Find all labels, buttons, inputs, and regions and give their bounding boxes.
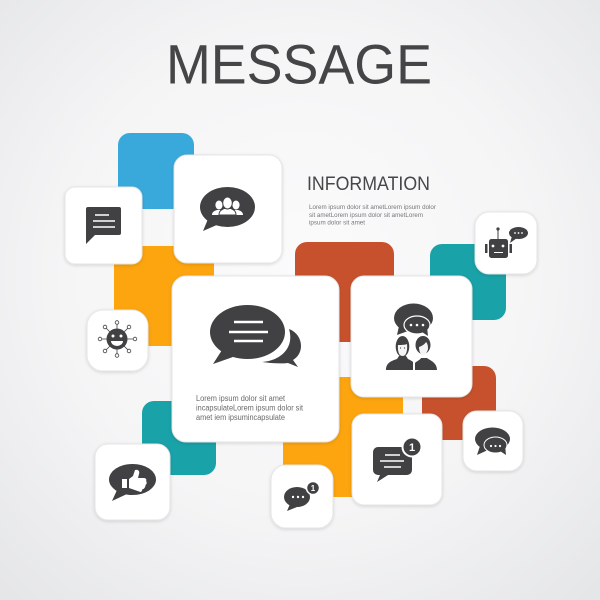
icon: double bubble (210, 305, 301, 367)
panel: notification message (352, 414, 442, 505)
block: teal left (142, 401, 216, 475)
panel: robot (475, 212, 537, 274)
icon: robot (485, 227, 528, 258)
block: red top (295, 242, 394, 342)
block: teal right (430, 244, 506, 320)
block: blue (118, 133, 194, 209)
panel: group chat (174, 155, 282, 263)
text block: information description: sit ametLorem ipsum dolor sit ametLorem (309, 212, 423, 219)
panel: smile network (87, 310, 148, 371)
panel: like (95, 444, 170, 520)
panel: message (65, 187, 142, 264)
text block: main description: Lorem ipsum dolor sit amet (196, 394, 286, 403)
icon: square bubble (86, 207, 121, 244)
block: red bottom (422, 366, 496, 440)
block: orange bottom (283, 377, 403, 497)
icon: smile network (98, 321, 137, 357)
title: MESSAGE (166, 32, 432, 96)
panel: chat bubbles (463, 411, 523, 471)
heading: information: INFORMATION (307, 174, 430, 195)
colour blocks (114, 133, 506, 497)
panel: couple (351, 276, 472, 397)
text block: main description (196, 394, 304, 422)
icon: thumbs up bubble (109, 464, 156, 501)
icon: group bubble (200, 187, 255, 231)
panel: small notification (271, 465, 333, 528)
icon: notification bubble: 1 (409, 442, 415, 454)
icon: dots bubble with badge: 1 (311, 484, 316, 493)
text block: main description: amet iem ipsumincapsulate (196, 413, 286, 422)
text block: main description: incapsulateLorem ipsum dolor sit (196, 404, 304, 412)
icon: couple with bubbles (386, 304, 437, 370)
icon: overlapping bubbles (475, 428, 510, 455)
text block: information description: Lorem ipsum dolor sit ametLorem ipsum dolor (309, 204, 437, 211)
text block: information description: ipsum dolor sit amet (309, 220, 365, 226)
text block: information description (309, 204, 437, 226)
block: orange left (114, 246, 214, 346)
panel: main (172, 276, 339, 442)
